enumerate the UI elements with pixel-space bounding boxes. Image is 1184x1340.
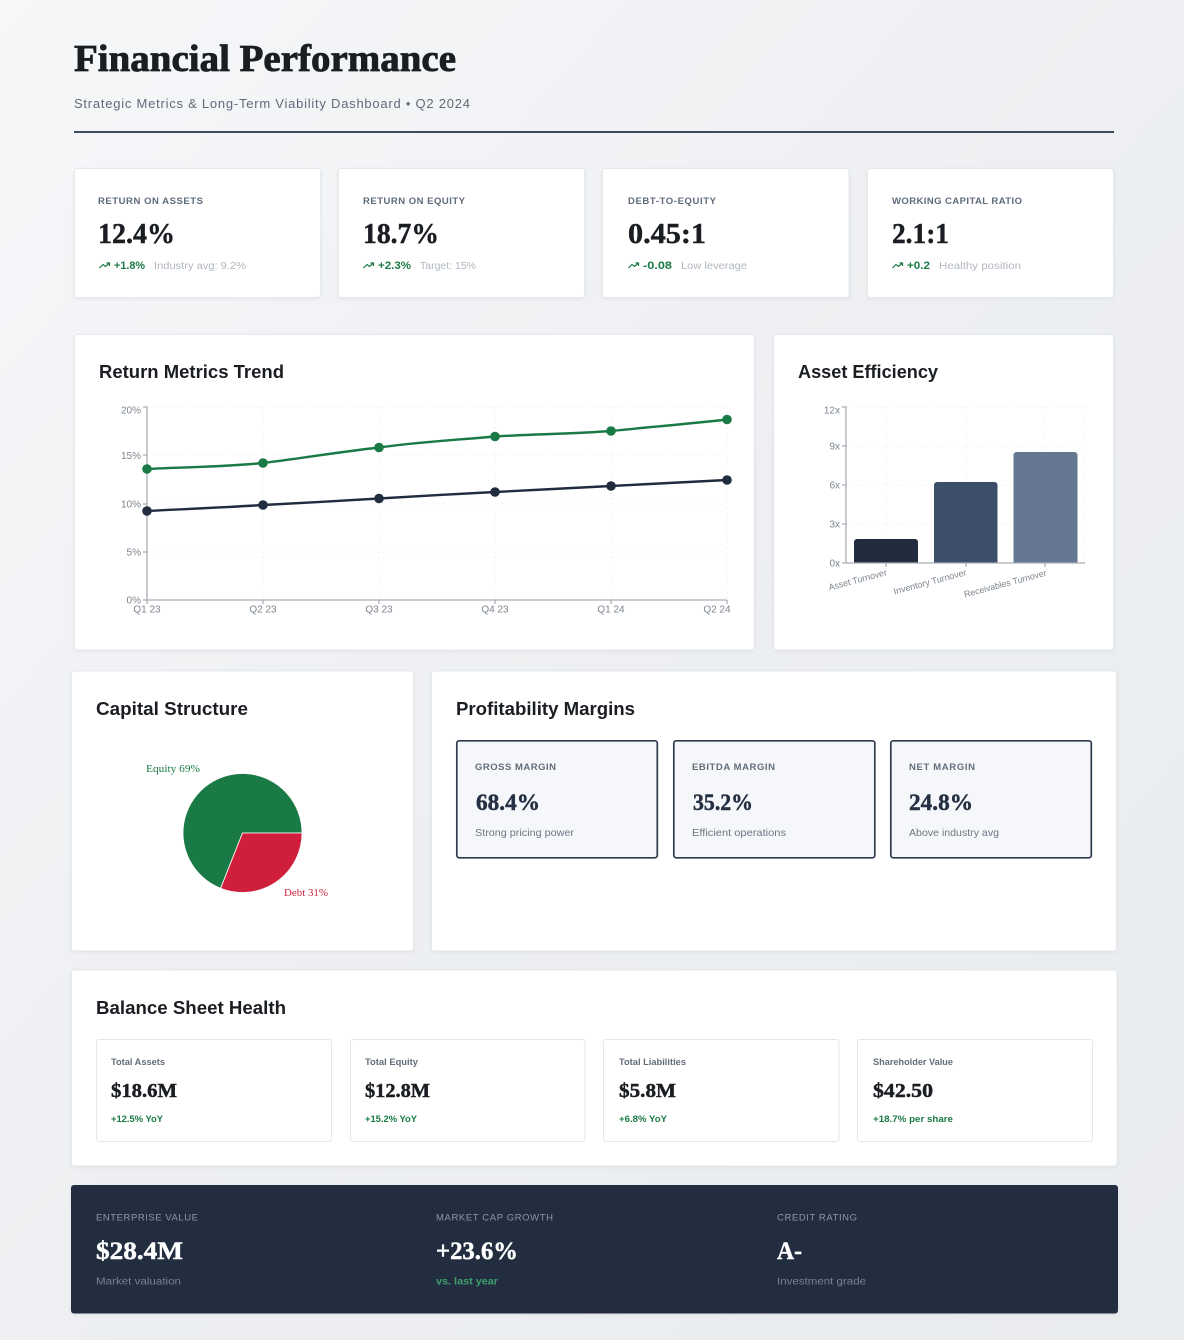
panel: working capital ratio: Healthy position (939, 261, 1021, 272)
margin card: ebitda: EBITDA MARGIN (692, 762, 775, 773)
margin card: ebitda: 35.2% (693, 790, 753, 815)
line chart axes: 10% (121, 500, 141, 510)
title: Financial Performance (74, 38, 456, 80)
panel: debt to equity: -0.08 (643, 260, 672, 272)
line chart axes: Q1 23 (133, 604, 161, 616)
panel: working capital ratio: 2.1:1 (892, 218, 949, 250)
line chart axes: Q2 23 (249, 604, 277, 616)
heading: Profitability Margins (456, 699, 635, 719)
heading: Balance Sheet Health (96, 998, 286, 1018)
margin card: net: NET MARGIN (909, 762, 975, 773)
line chart axes: 20% (121, 406, 141, 416)
summary: credit rating: Investment grade (777, 1276, 867, 1288)
bar: receivables turnover (1014, 452, 1078, 563)
bar chart axes: 0x (829, 558, 840, 570)
line chart axes: Q1 24 (597, 604, 625, 616)
stat: total assets (96, 1040, 332, 1142)
panel: working capital ratio (868, 168, 1114, 298)
icon: trend up (628, 263, 638, 268)
stat: total assets: +12.5% YoY (111, 1114, 163, 1124)
summary: market cap growth: vs. last year (436, 1276, 498, 1288)
subtitle: Strategic Metrics & Long-Term Viability Dashboard • Q2 2024 (74, 96, 470, 111)
icon: trend up (892, 263, 902, 268)
bar: inventory turnover (934, 482, 998, 563)
line chart axes: Q4 23 (481, 604, 509, 616)
pie chart: Equity 69% (146, 763, 200, 775)
bar chart axes: Asset Turnover (827, 567, 888, 592)
stat: total assets: Total Assets (111, 1057, 165, 1067)
panel: return metrics trend (74, 334, 754, 650)
margin card: net (891, 741, 1091, 858)
panel: return on assets: Industry avg: 9.2% (154, 261, 246, 272)
stat: shareholder value: $42.50 (873, 1080, 933, 1102)
panel: debt to equity: DEBT-TO-EQUITY (628, 196, 717, 207)
panel: balance sheet health (72, 970, 1117, 1166)
line: return on equity (142, 415, 732, 474)
panel: working capital ratio: WORKING CAPITAL RATIO (892, 196, 1022, 207)
margin card: gross (457, 741, 657, 858)
bar chart axes: 3x (829, 520, 840, 530)
bar chart axes: Inventory Turnover (892, 567, 967, 596)
panel: profitability margins (432, 671, 1116, 951)
heading: Capital Structure (96, 699, 248, 719)
margin card: gross: GROSS MARGIN (475, 762, 556, 773)
stat: total assets: $18.6M (111, 1080, 177, 1102)
stat: total liabilities (604, 1040, 839, 1142)
bar chart axes: 12x (824, 406, 840, 416)
stat: total equity: $12.8M (365, 1080, 430, 1102)
stat: shareholder value: Shareholder Value (873, 1057, 953, 1067)
margin card: net: Above industry avg (909, 827, 999, 839)
line chart axes: 0% (127, 596, 141, 606)
bar chart axes (824, 406, 1085, 599)
stat: total liabilities: +6.8% YoY (619, 1114, 667, 1124)
stat: shareholder value: +18.7% per share (873, 1114, 953, 1124)
summary: market cap growth: MARKET CAP GROWTH (436, 1212, 553, 1224)
panel: working capital ratio: +0.2 (907, 260, 930, 272)
stat: total liabilities: $5.8M (619, 1080, 676, 1102)
panel: return on assets (74, 168, 320, 298)
heading: Return Metrics Trend (99, 362, 284, 382)
stat: total equity: +15.2% YoY (365, 1114, 417, 1124)
line chart axes: Q2 24 (703, 604, 731, 616)
stat: shareholder value (858, 1040, 1092, 1142)
panel: return on equity: RETURN ON EQUITY (363, 196, 466, 207)
stat: total equity: Total Equity (365, 1057, 418, 1067)
summary: market cap growth (436, 1212, 553, 1288)
margin card: gross: 68.4% (476, 790, 540, 815)
heading: Asset Efficiency (798, 362, 938, 382)
bar chart axes: 6x (829, 480, 840, 492)
pie chart: Debt 31% (284, 887, 328, 899)
panel: capital structure (72, 671, 414, 951)
summary: market cap growth: +23.6% (436, 1238, 518, 1265)
panel: return on equity: 18.7% (363, 218, 439, 250)
panel: return on assets: RETURN ON ASSETS (98, 196, 203, 207)
panel: return on equity: Target: 15% (420, 261, 476, 272)
line: return on assets (142, 475, 732, 516)
bar chart axes: Receivables Turnover (963, 568, 1048, 599)
line chart axes: 15% (121, 451, 141, 462)
panel: asset efficiency (774, 334, 1114, 650)
panel: summary band (71, 1185, 1118, 1314)
line chart axes: 5% (127, 548, 141, 558)
panel: return on equity: +2.3% (378, 260, 411, 272)
panel: return on assets: 12.4% (98, 218, 175, 250)
summary: enterprise value: Market valuation (96, 1276, 181, 1288)
panel: debt to equity: Low leverage (681, 261, 747, 272)
summary: enterprise value: $28.4M (96, 1238, 183, 1265)
panel: debt to equity (602, 168, 849, 298)
line chart axes: Q3 23 (365, 604, 393, 616)
margin card: ebitda (674, 741, 875, 858)
header (74, 38, 1114, 133)
pie chart (146, 763, 328, 899)
summary: enterprise value: ENTERPRISE VALUE (96, 1212, 198, 1224)
summary: credit rating (777, 1212, 867, 1288)
icon: trend up (100, 263, 110, 268)
panel: return on equity (338, 168, 584, 298)
summary: credit rating: A- (777, 1238, 802, 1265)
panel: return on assets: +1.8% (114, 260, 145, 272)
stat: total equity (350, 1040, 585, 1142)
line chart axes (121, 406, 731, 616)
bar chart axes: 9x (829, 442, 840, 452)
bar: asset turnover (854, 539, 918, 563)
stat: total liabilities: Total Liabilities (619, 1057, 686, 1067)
summary: credit rating: CREDIT RATING (777, 1212, 857, 1224)
margin card: net: 24.8% (909, 790, 973, 815)
panel: debt to equity: 0.45:1 (628, 218, 706, 250)
icon: trend up (364, 263, 374, 268)
summary: enterprise value (96, 1212, 198, 1288)
margin card: gross: Strong pricing power (475, 827, 575, 839)
margin card: ebitda: Efficient operations (692, 827, 786, 839)
